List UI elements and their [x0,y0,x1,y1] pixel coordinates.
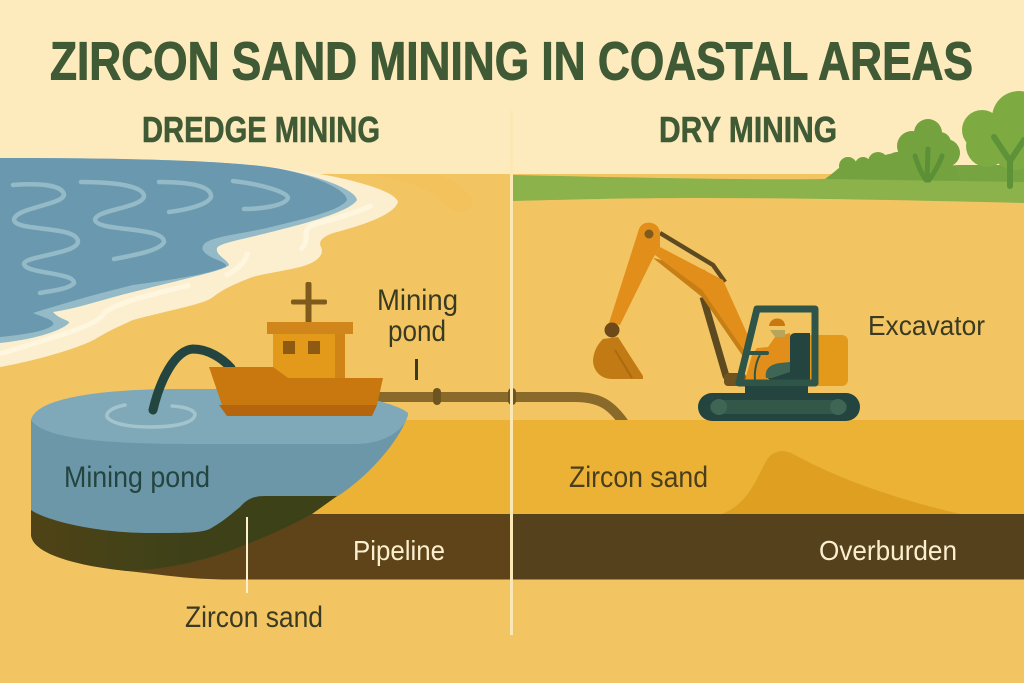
overburden band [240,514,1024,580]
boom shadow [653,258,750,358]
mining pond [31,389,408,580]
excavator [593,223,860,421]
dredge boat [209,282,383,416]
label: zircon sand lower: Zircon sand [185,601,323,634]
label: mining pond upper: pond [388,315,446,348]
sand ground [0,174,1024,683]
water ripple [107,405,195,427]
bucket [593,337,643,379]
upper strut [660,233,725,282]
dredge hose [153,349,231,410]
label: excavator: Excavator [868,310,985,341]
undercarriage [745,386,808,400]
label: mining pond upper [377,284,458,380]
engine housing [805,335,848,386]
tree [962,91,1024,186]
pointer line [246,517,248,593]
sea with waves [0,158,398,367]
track [698,393,860,421]
label: mining pond upper: Mining [377,284,458,317]
label: pipeline: Pipeline [353,535,445,566]
seat [767,333,810,380]
operator [745,318,795,380]
cab frame [739,309,815,383]
stick [609,223,660,325]
lower strut [703,297,745,379]
sand mound [722,451,960,514]
small bushes [825,119,960,180]
heading: dredge mining: DREDGE MINING [142,109,380,150]
heading: dry mining: DRY MINING [659,109,837,150]
label: mining pond: Mining pond [64,461,210,494]
label: zircon sand right: Zircon sand [569,461,708,494]
zircon sand layer [300,420,1024,514]
center divider [510,110,513,635]
boom [655,247,750,352]
label: overburden: Overburden [819,535,957,566]
pipeline [378,388,626,426]
grass strip [513,165,1024,203]
